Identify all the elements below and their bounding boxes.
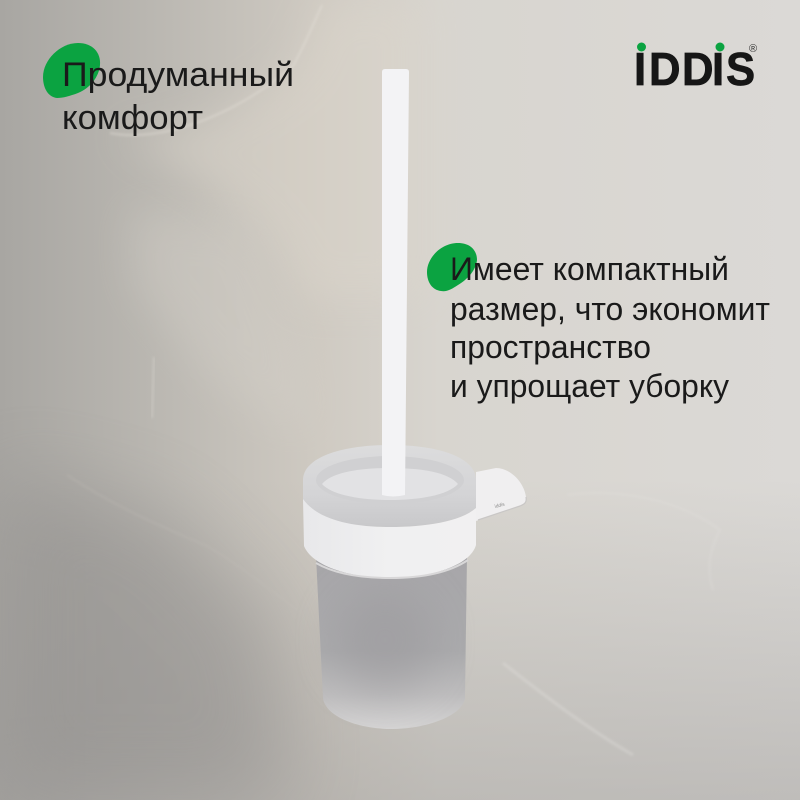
logo: IDDIS: ® — [749, 43, 757, 55]
heading: Продуманный — [62, 56, 294, 94]
frosted glass cup — [316, 556, 467, 729]
logo: IDDIS: IDDIS — [634, 43, 755, 95]
wall bracket: iddis — [494, 502, 506, 510]
callout text: размер, что экономит — [450, 291, 770, 327]
white mounting ring — [303, 499, 476, 578]
frosted glass rim — [303, 445, 476, 527]
callout text: пространство — [450, 329, 651, 365]
callout text: и упрощает уборку — [450, 368, 729, 404]
callout text: Имеет компактный — [450, 251, 729, 287]
callout text — [450, 251, 770, 404]
accent blob: heading — [43, 43, 100, 98]
accent blob: callout — [427, 243, 477, 291]
rim inner opening — [316, 456, 464, 504]
product: wall-mounted toilet brush holder — [303, 69, 526, 729]
heading second line: комфорт — [62, 99, 203, 137]
white brush handle — [382, 69, 409, 496]
wall bracket — [476, 468, 526, 521]
